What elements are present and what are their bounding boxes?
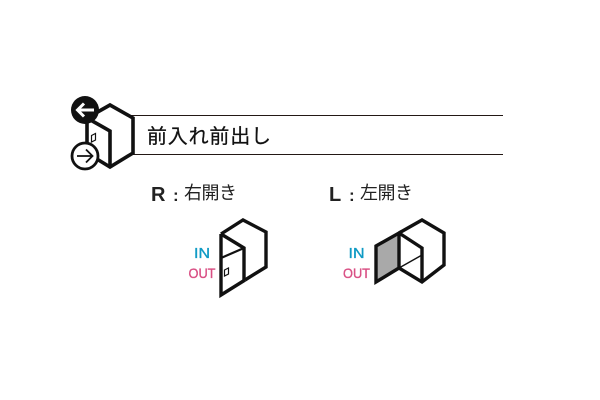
icon: locker with right-hinged door [221, 220, 266, 295]
heading: 前入れ前出し [147, 125, 272, 148]
label: OUT: OUT [188, 265, 216, 281]
heading: R: R [151, 184, 166, 206]
heading: L: : [349, 186, 355, 205]
panel: L left-hinged [329, 183, 444, 282]
heading: L: 左開き [360, 183, 413, 203]
heading: R: : [173, 186, 179, 205]
icon: locker with front entry and exit [71, 96, 133, 169]
header band: front-in front-out [71, 96, 503, 169]
panel: R right-hinged [151, 183, 266, 295]
heading: R: 右開き [184, 183, 237, 203]
label: IN: IN [194, 245, 210, 262]
icon: locker with left-hinged open door [376, 220, 444, 282]
label: OUT: OUT [343, 265, 370, 281]
label: IN: IN [348, 245, 364, 262]
heading: L: L [329, 184, 341, 206]
